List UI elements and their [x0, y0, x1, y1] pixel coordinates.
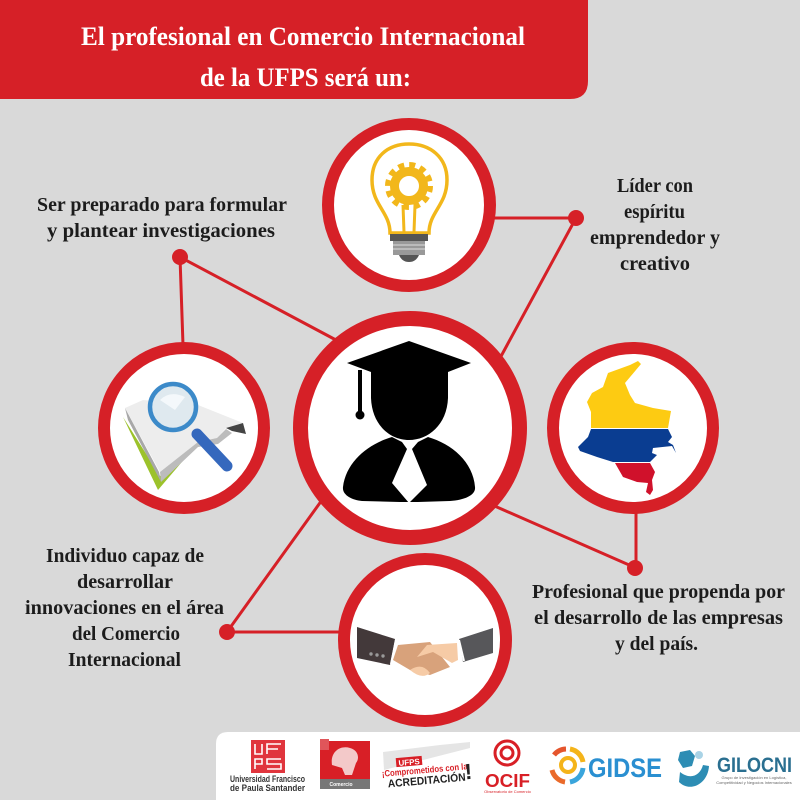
- icon: open book with magnifying glass: [123, 384, 246, 490]
- panel: Colombia map circle: [553, 348, 713, 508]
- text: innovaciones: [25, 545, 224, 671]
- logo: acreditación: ¡Comprometidos con la: [381, 761, 469, 779]
- text: investigaciones: y plantear investigaciones: [47, 220, 275, 242]
- text: líder: creativo: [620, 253, 690, 275]
- text: líder: Líder con: [617, 175, 693, 197]
- logo: UFPS: [230, 740, 305, 793]
- text: innovaciones: desarrollar: [77, 571, 173, 593]
- text: innovaciones: Internacional: [68, 649, 181, 671]
- panel: central graduate circle: [300, 318, 520, 538]
- title: El profesional en Comercio Internacional: [81, 22, 525, 51]
- footer logo strip: [216, 732, 800, 800]
- logo: acreditación: ACREDITACIÓN: [387, 771, 466, 790]
- panel: book and magnifier circle: [104, 348, 264, 508]
- logo: acreditación: !: [464, 759, 473, 784]
- text: innovaciones: Individuo capaz de: [46, 545, 204, 567]
- text: líder: espíritu: [624, 201, 685, 223]
- logo: GILOCNI: [678, 750, 792, 787]
- text: líder: emprendedor y: [590, 227, 720, 249]
- logo: GILOCNI: Grupo de Investigación en Logística,: [722, 775, 786, 780]
- logo: acreditación: [381, 742, 473, 790]
- header banner: [0, 0, 588, 99]
- text: innovaciones: del Comercio: [72, 623, 180, 645]
- icon: lightbulb with gear: [372, 144, 447, 262]
- text: investigaciones: Ser preparado para formular: [37, 194, 287, 216]
- icon: map of Colombia in flag colours: [578, 361, 676, 495]
- logo: OCIF: [484, 741, 532, 794]
- text: profesional: y del país.: [615, 633, 698, 655]
- panel: handshake circle: [344, 559, 506, 721]
- connector dots: [172, 210, 643, 640]
- logo: OCIF: OCIF: [485, 771, 530, 791]
- logo: UFPS: Universidad Francisco: [230, 774, 305, 784]
- text: profesional: Profesional que propenda por: [532, 581, 785, 603]
- title: de la UFPS será un:: [200, 63, 411, 92]
- logo: GILOCNI: Competitividad y Negocios Internacionales: [716, 780, 792, 785]
- text: líder: [590, 175, 720, 275]
- text: profesional: [532, 581, 785, 655]
- logo: Comercio Internacional: Comercio: [329, 782, 353, 788]
- icon: handshake: [357, 627, 493, 676]
- title: [81, 22, 525, 92]
- logo: UFPS: de Paula Santander: [230, 783, 305, 793]
- logo: acreditación: UFPS: [398, 757, 421, 768]
- logo: OCIF: Observatorio de Comercio: [484, 789, 532, 794]
- panel: lightbulb circle: [328, 124, 490, 286]
- logo: Comercio Internacional: [320, 739, 370, 789]
- logo: GIDSE: GIDSE: [588, 753, 662, 783]
- logo: GIDSE: [552, 749, 662, 783]
- connector lines: [180, 218, 636, 632]
- text: investigaciones: [37, 194, 287, 242]
- text: profesional: el desarrollo de las empresas: [534, 607, 783, 629]
- icon: graduate with cap and tie: [343, 341, 475, 503]
- text: innovaciones: innovaciones en el área: [25, 597, 224, 619]
